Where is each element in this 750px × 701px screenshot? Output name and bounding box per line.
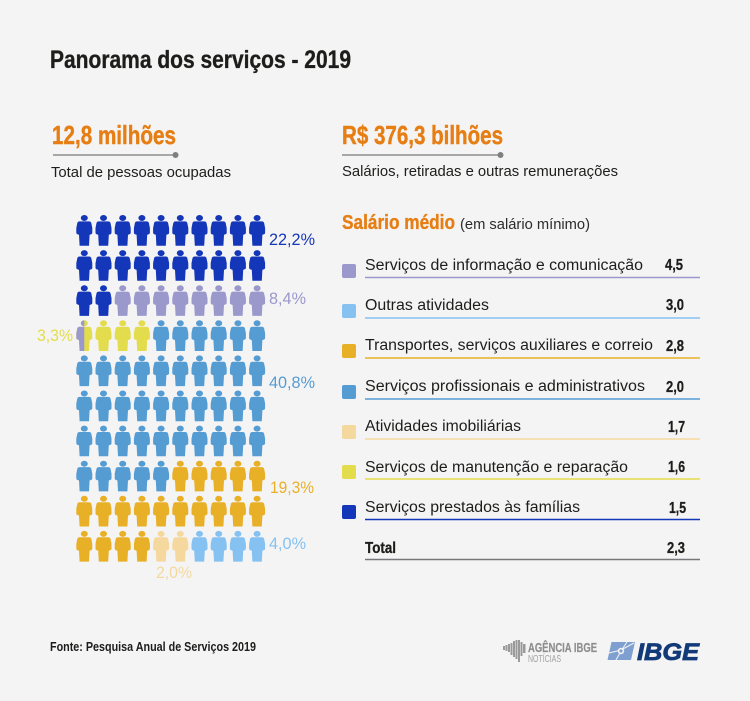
row: informação e comunicação: Serviços de informação e comunicação (365, 257, 643, 274)
row: profissionais e administrativos: 2,0 (666, 379, 684, 396)
row 2 (76, 250, 265, 281)
row: outras atividades: 3,0 (666, 297, 684, 314)
row: total: Total (365, 540, 396, 557)
row: prestados às famílias (342, 499, 700, 520)
percentage labels: 2,0% (156, 564, 192, 582)
percentage labels: 22,2% (269, 231, 315, 249)
row: imobiliárias: 1,7 (668, 419, 685, 436)
percentage labels: 19,3% (270, 479, 314, 497)
row: manutenção e reparação: Serviços de manutenção e reparação (365, 459, 628, 476)
percentage labels: 8,4% (269, 290, 306, 308)
row: imobiliárias: Atividades imobiliárias (365, 418, 521, 435)
percentage labels: 40,8% (269, 374, 315, 392)
row 9 (76, 496, 265, 526)
row: prestados às famílias: Serviços prestados às famílias (365, 499, 580, 516)
stat: total de pessoas ocupadas (51, 120, 231, 181)
logo: Agência IBGE Notícias: NOTÍCIAS (528, 652, 561, 665)
row: outras atividades (342, 297, 700, 318)
row 4 (76, 320, 265, 351)
row: profissionais e administrativos (342, 378, 700, 399)
stat: total de pessoas ocupadas: 12,8 milhões (52, 120, 176, 150)
row: manutenção e reparação (342, 459, 700, 479)
row: transportes (342, 337, 700, 358)
row 7 (76, 426, 265, 456)
stat: total de pessoas ocupadas: Total de pessoas ocupadas (51, 164, 231, 181)
row 5 (76, 355, 265, 386)
row 10 (76, 531, 265, 562)
row: transportes: Transportes, serviços auxiliares e correio (365, 337, 653, 354)
percentage labels (37, 231, 315, 582)
percentage labels: 3,3% (37, 327, 73, 345)
heading: salário médio (342, 212, 590, 234)
icon: Brazil bars (503, 640, 526, 662)
row: profissionais e administrativos: Serviços profissionais e administrativos (365, 378, 645, 395)
salary table (342, 257, 700, 560)
row: transportes: 2,8 (666, 338, 684, 355)
stat: salários, retiradas e outras remunerações (342, 120, 618, 180)
logo: IBGE (608, 639, 700, 666)
pictogram chart: pessoas ocupadas por atividade (76, 215, 265, 562)
row: total: 2,3 (667, 540, 685, 557)
title: Panorama dos serviços - 2019 (50, 46, 351, 74)
row 1 (76, 215, 265, 246)
row 3 (76, 285, 265, 316)
heading: salário médio: Salário médio (342, 212, 455, 234)
row: manutenção e reparação: 1,6 (668, 459, 685, 476)
logo: IBGE: IBGE (637, 639, 700, 666)
row 6 (76, 390, 265, 421)
row: total (365, 540, 700, 560)
row: informação e comunicação: 4,5 (665, 257, 683, 274)
source note: Fonte: Pesquisa Anual de Serviços 2019 (50, 639, 256, 654)
percentage labels: 4,0% (269, 535, 306, 553)
heading: salário médio: (em salário mínimo) (460, 217, 590, 233)
stat: salários, retiradas e outras remunerações: R$ 376,3 bilhões (342, 120, 503, 150)
row: outras atividades: Outras atividades (365, 297, 489, 314)
row 8 (76, 461, 265, 491)
row: informação e comunicação (342, 257, 700, 278)
logo: Agência IBGE Notícias: AGÊNCIA IBGE (528, 640, 597, 655)
stat: salários, retiradas e outras remunerações: Salários, retiradas e outras remunerações (342, 163, 618, 180)
row: prestados às famílias: 1,5 (669, 500, 686, 517)
logo: Agência IBGE Notícias (503, 640, 597, 665)
row: imobiliárias (342, 418, 700, 439)
icon: IBGE emblem (608, 642, 635, 660)
